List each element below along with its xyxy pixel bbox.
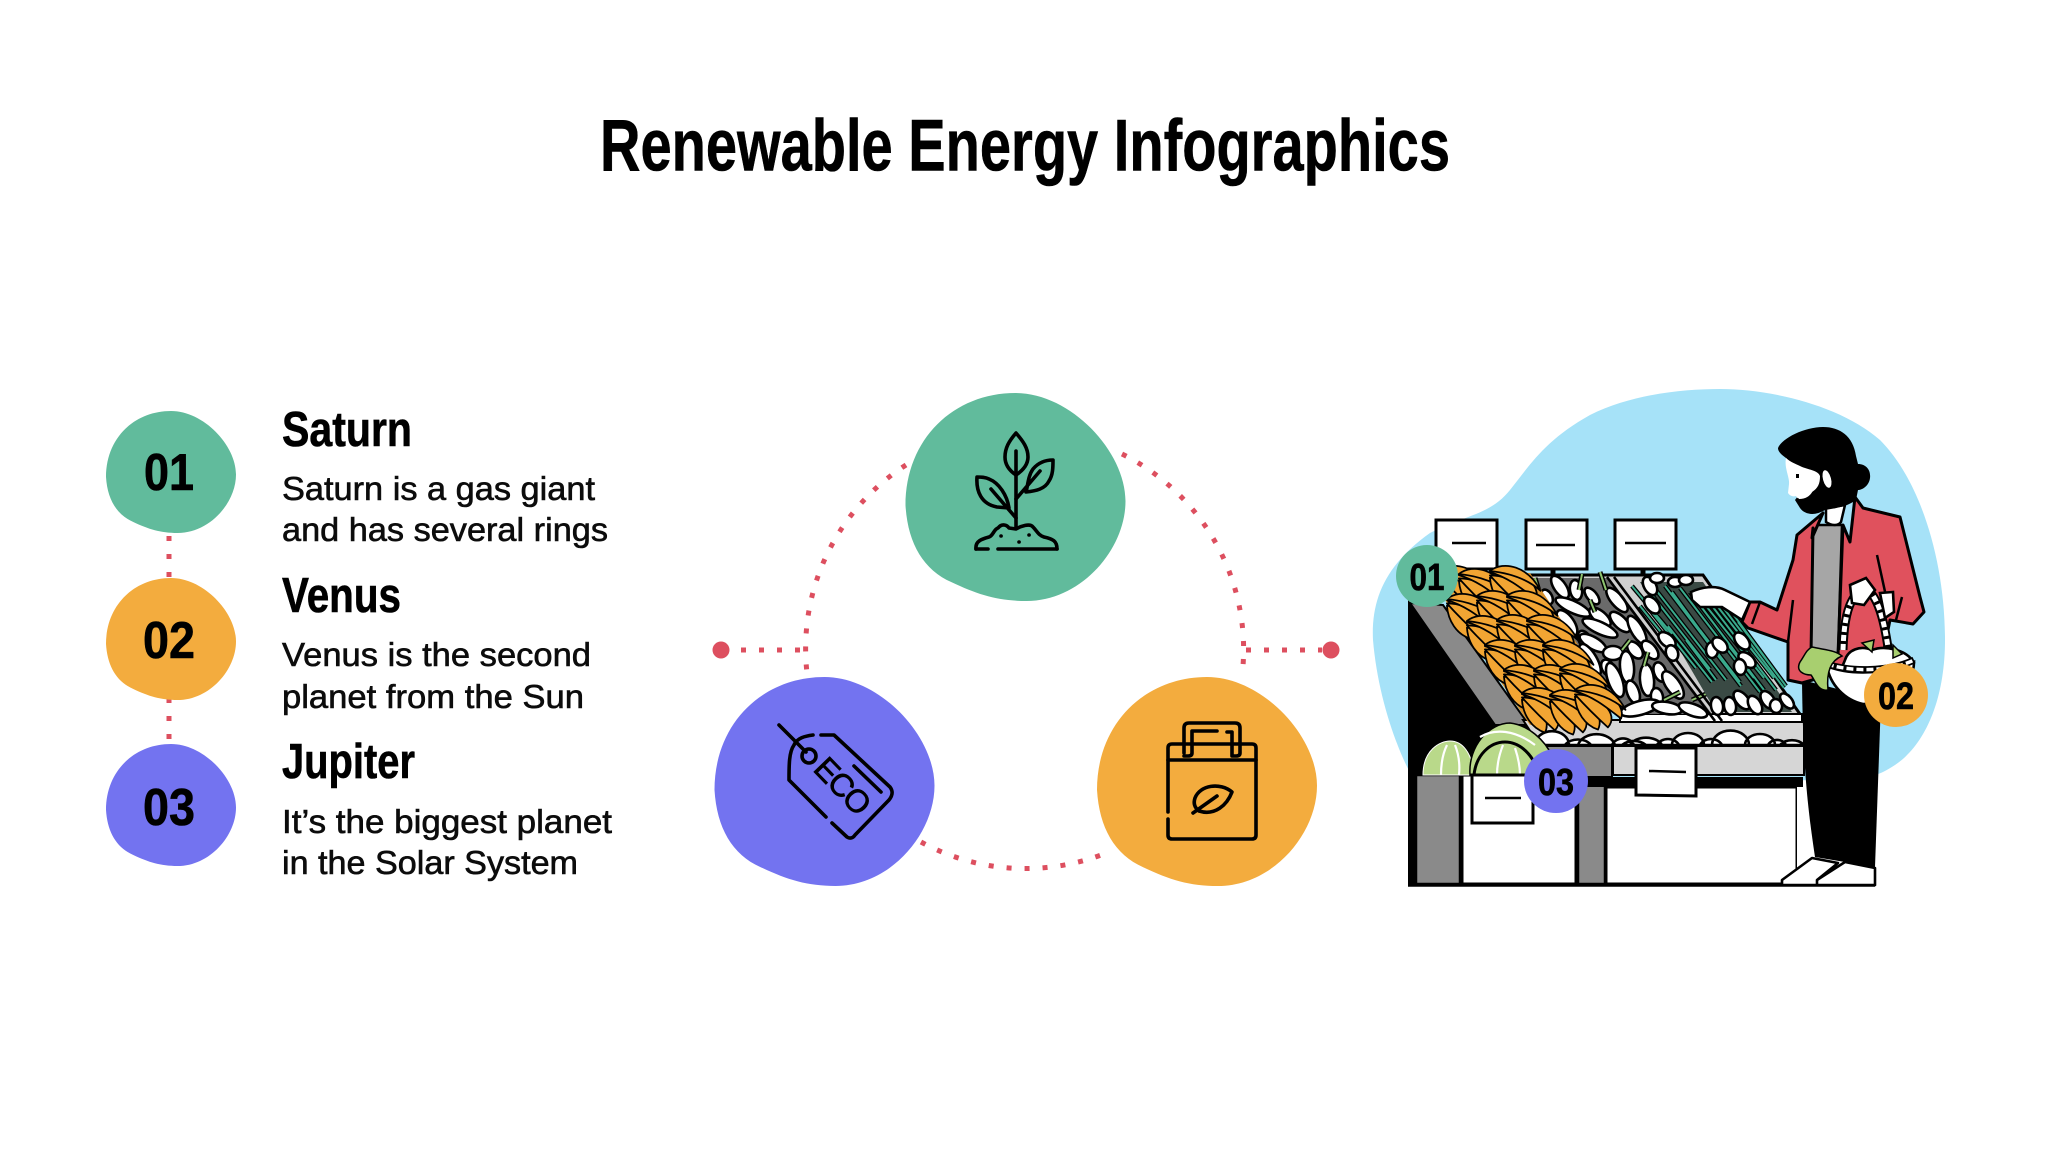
central cycle diagram [712,393,1340,886]
tray white lip [1620,714,1802,722]
left connector [712,642,807,658]
badge 02 [1864,663,1928,727]
dotted circle bottom arc [921,842,1111,869]
description Jupiter: It’s the biggest planet [282,803,612,840]
description Venus: Venus is the second [282,636,591,673]
badge 02: 02 [1878,676,1914,718]
badge 01 [1396,545,1458,607]
badge 03 [1524,749,1588,813]
radish bin [1530,572,1712,721]
blue background blob [1373,389,1945,790]
stand body [1408,600,1875,886]
purple blob [714,677,934,886]
badge 03: 03 [1538,762,1574,804]
illustration: market stall with shopper [1373,389,1945,886]
dotted circle upper arcs [806,454,1244,676]
hair and beard [1778,427,1870,514]
heading Saturn: Saturn [282,403,412,457]
small crate signs [1472,748,1696,823]
badge 03: 03 [143,779,195,837]
green blob [906,393,1126,601]
heading Venus: Venus [282,569,401,623]
white eggs row [1535,731,1804,745]
title: Renewable Energy Infographics [600,106,1450,186]
heading Jupiter: Jupiter [282,735,415,789]
neck [1826,505,1845,525]
reaching hand [1691,587,1750,620]
gray shirt [1811,525,1842,655]
badge 01: 01 [144,444,194,502]
badge 01 [106,411,236,533]
description Venus: planet from the Sun [282,678,584,715]
tray back rail [1520,575,1802,717]
bin divider [1607,577,1722,721]
connector dots between list badges [166,536,172,744]
numbered list panel [106,403,612,881]
spring onion bin [1632,573,1797,717]
badge 02 [106,578,236,700]
carrot bunches [1439,566,1626,735]
shopper [1691,427,1924,885]
badge 03 [106,744,236,866]
icon: sprout [976,433,1057,549]
price signs [1436,520,1676,580]
badge 02: 02 [143,612,195,670]
description Saturn: and has several rings [282,511,608,548]
basket [1799,578,1914,704]
shoes [1782,858,1875,885]
orange blob [1097,677,1317,886]
icon: eco tag: ECO [807,750,879,822]
right connector [1246,642,1340,658]
badge 01: 01 [1410,557,1444,599]
description Jupiter: in the Solar System [282,844,578,881]
description Saturn: Saturn is a gas giant [282,470,595,507]
icon: eco tag [779,725,892,838]
face [1786,458,1820,499]
red jacket [1742,497,1924,683]
cabbages [1423,723,1552,775]
trousers [1802,680,1881,867]
icon: shopping bag [1168,723,1256,839]
